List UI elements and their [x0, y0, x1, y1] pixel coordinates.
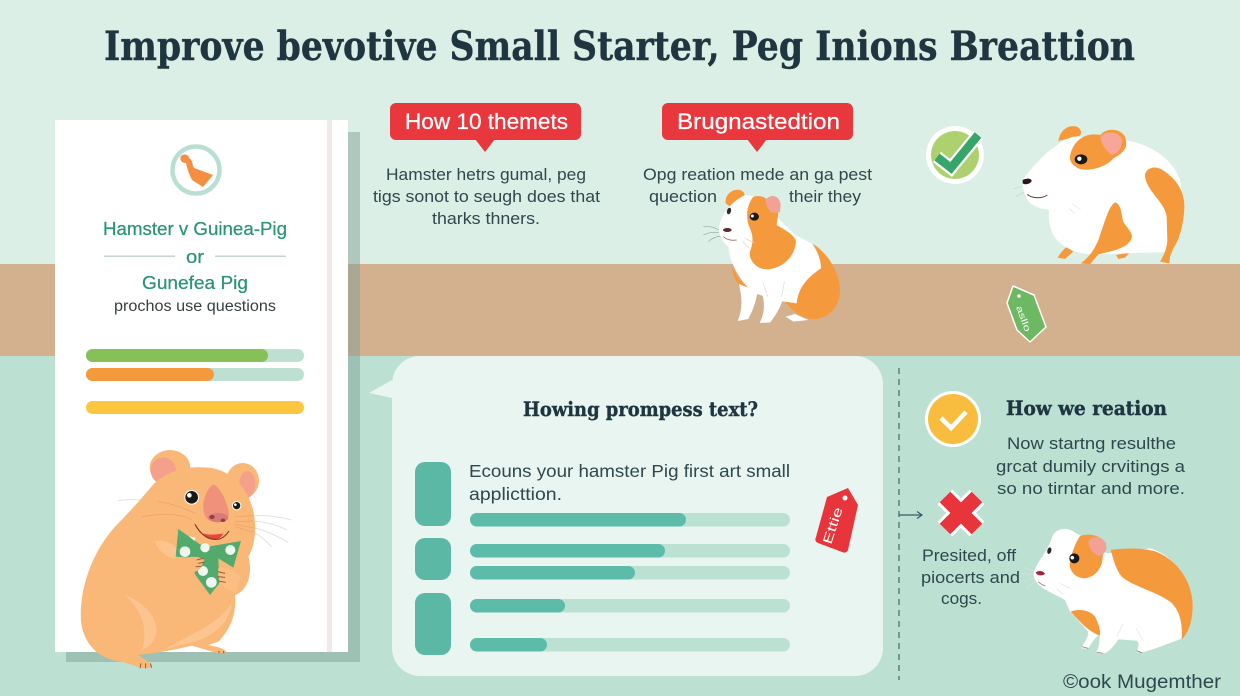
panel heading: Howing prompess text? — [523, 398, 758, 421]
red badge: How 10 themets — [390, 103, 581, 152]
text block: how we reation: grcat dumily crvitings a — [996, 457, 1186, 476]
text block: cross caption: piocerts and — [921, 568, 1020, 587]
text block: guinea pig description — [643, 165, 872, 206]
red badge: Brugnastedtion — [662, 103, 853, 152]
icon: red price tag — [815, 488, 858, 553]
card caption: prochos use questions — [114, 298, 276, 315]
text block: hamster description: tigs sonot to seugh does that — [373, 187, 600, 206]
bar chart — [470, 513, 790, 652]
red badge: Brugnastedtion: Brugnastedtion — [677, 109, 840, 134]
panel text — [469, 461, 790, 504]
icon: red cross — [945, 497, 977, 529]
guinea pig: standing top right — [1013, 126, 1184, 264]
text block: cross caption — [921, 546, 1020, 608]
icon: green price tag: asllo — [1014, 304, 1033, 333]
icon: orange carrot badge — [172, 146, 220, 194]
heading: how we reation: How we reation — [1006, 397, 1167, 420]
panel text: Ecouns your hamster Pig first art small — [469, 461, 790, 481]
red badge: How 10 themets: How 10 themets — [405, 109, 568, 134]
text block: how we reation: so no tirntar and more. — [997, 479, 1185, 498]
guinea pig: sitting on tan band — [703, 190, 840, 323]
dashed divider with arrow — [899, 368, 922, 680]
panel: left card — [55, 120, 360, 662]
text block: guinea pig description: their they — [789, 187, 862, 206]
icon: green check badge — [926, 126, 984, 184]
text block: cross caption: cogs. — [941, 589, 982, 608]
card or label: or — [186, 247, 204, 267]
icon: yellow check badge — [925, 391, 981, 447]
footer credit: ©ook Mugemther — [1063, 672, 1222, 693]
text block: how we reation — [996, 434, 1186, 498]
text block: hamster description: Hamster hetrs gumal, peg — [386, 165, 586, 184]
text block: hamster description: tharks thners. — [432, 209, 540, 228]
guinea pig: bottom right — [1022, 529, 1193, 654]
row markers — [415, 462, 451, 655]
text block: guinea pig description: quection — [649, 187, 717, 206]
icon: green bow tie — [176, 529, 241, 595]
card subheading: Gunefea Pig — [142, 273, 248, 293]
text block: guinea pig description: Opg reation mede an ga pest — [643, 165, 872, 184]
panel text: applicttion. — [469, 484, 562, 504]
panel: speech bubble chart — [369, 356, 883, 676]
card heading: Hamster v Guinea-Pig — [103, 219, 287, 239]
icon: green price tag — [1007, 286, 1046, 342]
icon: red price tag: Ettie — [820, 505, 846, 546]
text block: hamster description — [373, 165, 600, 228]
hamster illustration — [81, 450, 292, 668]
text block: cross caption: Presited, off — [922, 546, 1016, 565]
progress bars — [86, 349, 304, 414]
text block: how we reation: Now startng resulthe — [1007, 434, 1176, 453]
